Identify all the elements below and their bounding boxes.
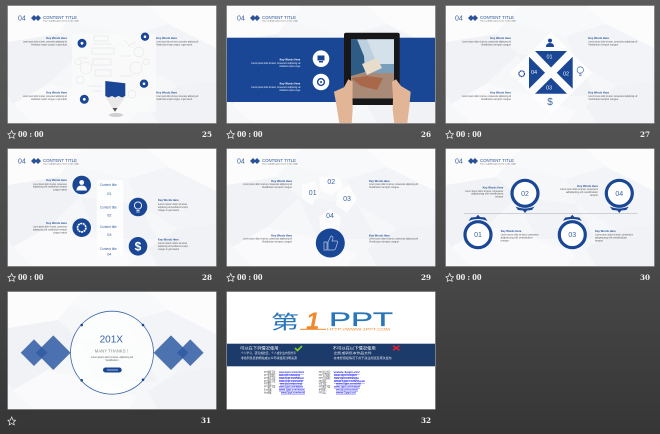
rings [465, 180, 632, 248]
text block: 04: Lorem ipsum dolor sit amet, consectetur [560, 188, 598, 191]
text block: bottom left: Vestibulum tempor congue [481, 98, 512, 101]
text block: bottom right: Vestibulum tempor congue, in gat mauris [156, 98, 193, 101]
petal numbers [309, 179, 351, 220]
text block: bottom left: Lorem ipsum dolor sit amet, consectetur adipiscing elit [243, 237, 292, 240]
slide header: Your subtitle goes here in the slide [43, 163, 79, 166]
text block: 04: adipiscing elit vestibulum [566, 191, 598, 194]
panel: slide 26 [226, 6, 436, 124]
link list left: www.1ppt.com/beijing/ [278, 373, 300, 377]
text block: left 1: congue mauris [53, 189, 68, 192]
link list left: www.1ppt.com/word/ [280, 390, 305, 394]
panel: slide 31 [8, 292, 216, 410]
slide header: CONTENT TITLE [262, 158, 296, 163]
prohibited usage [333, 346, 400, 360]
text block: top left: Lorem ipsum dolor sit amet, consectetur adipiscing elit [243, 183, 292, 186]
link list left: PPT素材下载： [264, 379, 277, 383]
closing text: Vestibulum [106, 359, 119, 362]
diagram numbers: 03 [546, 86, 552, 92]
link list left: PPT课件下载： [264, 385, 277, 389]
text block: bottom left: Lorem ipsum dolor sit amet, consectetur adipiscing elit [23, 95, 67, 98]
large circle [70, 311, 154, 394]
prohibited usage: ·出售或转售本作品文件 [333, 351, 372, 355]
text block: top right [588, 36, 638, 46]
text block: 04: Key Words Here [577, 184, 598, 188]
text block: 02: Key Words Here [483, 185, 504, 189]
text block: key words 1: Key Words Here [280, 58, 301, 62]
footer: slide 30: 30 [640, 273, 650, 282]
logo: PPT [329, 310, 394, 331]
text block: bottom right: Lorem ipsum dolor sit amet, consectetur adipiscing elit [369, 237, 418, 240]
text block: bottom right: Lorem ipsum dolor sit amet, consectetur adipiscing elit [156, 95, 199, 98]
logo: 1 [306, 308, 319, 335]
slide header: 04 [18, 158, 26, 166]
text block: bottom right: Lorem ipsum dolor sit amet, consectetur adipiscing elit [588, 95, 638, 98]
text block: 02 [465, 185, 504, 199]
link list right: www.1ppt.com/hangye/ [333, 376, 359, 380]
slide header: 04 [455, 158, 463, 166]
slide header [455, 15, 516, 23]
text block: top right: Key Words Here [588, 36, 610, 40]
text block: bottom left: Vestibulum tempor congue, in gat mauris [31, 98, 68, 101]
footer: slide 26 [227, 129, 431, 139]
text block: key words 1 [251, 58, 301, 68]
diagram numbers [531, 55, 569, 92]
footer: slide 25: 00 : 00 [18, 129, 44, 139]
footer: slide 29: 00 : 00 [237, 272, 263, 282]
link list right: www.1ppt.com/sucai/ [333, 379, 365, 383]
text block: right 1: congue in gat mauris [158, 209, 180, 212]
usage band [227, 344, 435, 366]
icon markers [78, 32, 149, 104]
text block: bottom left: Key Words Here [46, 90, 67, 94]
text block: right 1: Lorem ipsum dolor sit amet [158, 203, 187, 206]
link list right: www.1ppt.com/ziti/ [335, 382, 361, 386]
text block: left 2: Key Words Here [46, 221, 67, 225]
text block: bottom right: Vestibulum tempor congue [369, 241, 400, 244]
link list left: PPT教程： [264, 382, 273, 386]
icon: dollar circle [129, 237, 147, 256]
text block: key words 1: Lorem ipsum dolor sit amet, consectetur adipiscing elit [251, 62, 301, 65]
text block: bottom left: Lorem ipsum dolor sit amet, consectetur adipiscing elit [462, 95, 511, 98]
text block: bottom left: Vestibulum tempor congue [262, 241, 293, 244]
footer: slide 27 [446, 129, 650, 139]
text block: right 2 [158, 238, 188, 251]
icon: thumbs up circle [316, 228, 345, 258]
slide header [18, 15, 79, 23]
link list right: www.1ppt.com/jieri/ [333, 373, 357, 377]
logo: HTTP://WWW.1PPT.COM [327, 328, 390, 332]
text block: left 1: Lorem ipsum dolor sit amet, consectetur [33, 183, 67, 186]
petals [302, 177, 357, 231]
link list left [264, 370, 305, 394]
slide header: Your subtitle goes here in the slide [262, 163, 298, 166]
icon: people circle [72, 176, 91, 194]
petal numbers: 02 [327, 179, 335, 186]
text block: top right [156, 36, 199, 46]
text block: left 1: Key Words Here [46, 178, 67, 182]
text block: 02: tempor [495, 196, 504, 199]
link list left: Word模板： [264, 390, 273, 394]
text block: top left [23, 36, 68, 46]
text block: 01: tempor [501, 239, 509, 242]
link list left: PPT模板下载： [264, 370, 277, 374]
link list left: www.1ppt.com/moban/ [278, 370, 304, 374]
prohibited usage: 不可以在以下情况使用 [333, 346, 376, 351]
ring numbers: 03 [568, 232, 576, 239]
footer: slide 29: 29 [421, 273, 431, 282]
panel: slide 30 [446, 148, 654, 266]
footer: slide 31 [8, 416, 211, 425]
slide header: 04 [237, 16, 245, 22]
text block: right 1: Key Words Here [158, 198, 179, 202]
diagram numbers: 04 [531, 70, 537, 76]
text block: bottom right: Key Words Here [156, 90, 178, 94]
text block: top right: Lorem ipsum dolor sit amet, consectetur adipiscing elit [369, 183, 418, 186]
allowed usage: 可以在下列情况使用 [240, 346, 279, 351]
footer: slide 29 [227, 272, 431, 282]
text block: top right: Vestibulum tempor congue [369, 186, 400, 189]
link list right: www.1ppt.cn/ [335, 390, 356, 394]
text block: bottom right [369, 233, 418, 244]
link list right: PPT论坛交流： [319, 370, 332, 374]
tablet with photo and hands [334, 33, 411, 123]
logo [271, 308, 394, 335]
link list right [319, 370, 365, 394]
center cards: 01 [107, 191, 112, 196]
link list right: www.1ppt.com/shouchaobao/ [335, 387, 358, 391]
text block: right 2: congue in gat mauris [158, 248, 180, 251]
text block: top left: Key Words Here [271, 179, 292, 183]
slide header: CONTENT TITLE [43, 158, 77, 163]
text block: bottom right: Vestibulum tempor congue [588, 98, 619, 101]
text block: top right: Vestibulum tempor congue [588, 43, 619, 46]
panel: slide 25 [8, 6, 216, 124]
text block: left 2: Lorem ipsum dolor sit amet, consectetur [33, 226, 67, 229]
ring numbers: 02 [521, 191, 529, 198]
text block: bottom left [243, 233, 293, 244]
link list right: PPT素材： [319, 379, 328, 383]
text block: 04 [560, 184, 598, 197]
center cards: 04 [107, 251, 112, 256]
panel: slide 32 [226, 292, 436, 410]
text block: 01: Lorem ipsum dolor sit amet, consectetur [501, 234, 539, 237]
closing text: Lorem ipsum dolor sit amet, adipiscing elit [91, 356, 133, 359]
icon: person [546, 39, 554, 47]
text block: top left [462, 36, 512, 46]
text block: 01: adipiscing elit vestibulum [501, 236, 533, 239]
text block: top right: Lorem ipsum dolor sit amet, consectetur adipiscing elit [588, 41, 638, 44]
footer: slide 28 [8, 272, 212, 282]
slide header: CONTENT TITLE [262, 15, 296, 20]
text block: 02: Lorem ipsum dolor sit amet, consectetur [465, 190, 504, 193]
diamonds right [154, 335, 204, 370]
text block: 03: tempor [595, 239, 603, 242]
text block: top left: Key Words Here [46, 36, 67, 40]
text block: key words 2: Vestibulum tempor congue [279, 89, 301, 92]
text block: top left: Lorem ipsum dolor sit amet, consectetur adipiscing elit [23, 41, 67, 44]
slide header: CONTENT TITLE [480, 15, 514, 20]
year: 201X [100, 334, 123, 346]
center cards: 02 [107, 212, 112, 217]
link list right: PPT行业模板： [319, 376, 332, 380]
text block: top left: Key Words Here [490, 36, 511, 40]
icon: gear circle [72, 218, 91, 237]
link list right: 字体下载： [319, 382, 328, 386]
text block: top left: Vestibulum tempor congue, in gat mauris [31, 43, 68, 46]
link list left: PPT图表下载： [264, 376, 277, 380]
text block: bottom right [156, 90, 199, 101]
text block: 01 [501, 229, 539, 242]
slide header [18, 158, 79, 166]
slide header [237, 158, 298, 166]
text block: top right: Key Words Here [369, 179, 390, 183]
link list right: www.1ppt.com/xiazai/ [333, 385, 360, 389]
link list left: www.1ppt.com/kejian/ [278, 385, 303, 389]
ring numbers: 04 [615, 191, 623, 198]
slide header [455, 158, 516, 166]
text block: bottom left: Key Words Here [490, 90, 511, 94]
panel: slide 28 [8, 148, 216, 266]
petal numbers: 01 [309, 190, 317, 197]
text block: bottom left: Key Words Here [271, 233, 292, 237]
text block: key words 2: Lorem ipsum dolor sit amet, consectetur adipiscing elit [251, 86, 301, 89]
petal numbers: 03 [343, 196, 351, 203]
text block: 03: Key Words Here [595, 229, 616, 233]
slide header: 04 [455, 16, 463, 22]
icon: dollar circle: $ [135, 240, 142, 254]
panel: slide 27 [446, 6, 654, 124]
center cards: Content title [100, 247, 117, 251]
icon: dollar: $ [547, 97, 553, 108]
text block: top left [243, 179, 293, 189]
link list right: PPT教程下载： [319, 385, 332, 389]
text block: 04: tempor [590, 194, 598, 197]
footer: slide 30 [446, 272, 650, 282]
slide header: Your subtitle goes here in the slide [43, 20, 79, 23]
text block: key words 1: Vestibulum tempor congue [279, 65, 301, 68]
X diagram [529, 51, 573, 94]
link list right: www.1ppt.cn/ [332, 370, 360, 374]
text block: right 2: adipiscing elit vestibulum tempor [158, 245, 188, 248]
sketch doodles [72, 34, 156, 112]
text block: 03: Lorem ipsum dolor sit amet, consectetur [595, 234, 633, 237]
footer: slide 26: 26 [421, 130, 431, 139]
text block: left 2 [33, 221, 68, 235]
text block: bottom left [462, 90, 512, 101]
text block: 01: Key Words Here [501, 229, 522, 233]
icons: white circles [313, 50, 329, 90]
link list left: Excel模板： [264, 387, 273, 391]
icon: gear [519, 71, 524, 76]
text block: top left: Vestibulum tempor congue [481, 43, 512, 46]
center cards: Content title [100, 183, 117, 187]
timeline axis [464, 212, 637, 215]
text block: top left: Lorem ipsum dolor sit amet, consectetur adipiscing elit [462, 41, 511, 44]
prohibited usage: ·在未经授权情况下用于商业用途及再次发布 [333, 356, 392, 360]
center cards: Content title [100, 225, 117, 229]
panel: slide 29 [226, 148, 436, 266]
footer: slide 25 [8, 129, 212, 139]
slide header: CONTENT TITLE [480, 158, 514, 163]
button [103, 368, 122, 372]
text block: left 1 [33, 178, 68, 192]
text block: right 1 [158, 198, 188, 212]
text block: 03 [595, 229, 633, 242]
text block: top right: Key Words Here [156, 36, 178, 40]
text block: key words 2: Key Words Here [280, 82, 301, 86]
text block: top right [369, 179, 418, 189]
footer: slide 27: 00 : 00 [456, 129, 482, 139]
link list right: PPT论坛： [319, 390, 328, 394]
slide header: Your subtitle goes here in the slide [480, 20, 516, 23]
center cards [97, 180, 123, 257]
icon: bulb circle [129, 198, 147, 216]
text block: right 2: Lorem ipsum dolor sit amet [158, 242, 187, 245]
link list left: www.1ppt.com/jiaocheng/ [279, 382, 302, 386]
closing text [91, 356, 133, 362]
allowed usage [240, 346, 302, 360]
link list left: www.1ppt.com/excel/ [278, 387, 305, 391]
ring numbers: 01 [474, 232, 482, 239]
footer: slide 27: 27 [640, 130, 650, 139]
diagram numbers: 01 [546, 55, 553, 61]
text block: left 1: adipiscing elit vestibulum tempor [33, 186, 67, 189]
text block: right 1: adipiscing elit vestibulum tempor [158, 206, 188, 209]
footer: slide 32: 32 [421, 416, 431, 425]
chevrons [468, 206, 629, 221]
text block: top left: Vestibulum tempor congue [262, 186, 293, 189]
footer: slide 31: 31 [201, 416, 211, 425]
link list left: www.1ppt.com/sucai/ [278, 379, 303, 383]
diagram numbers: 02 [563, 72, 569, 78]
allowed usage: ·非盈利性质的网站或公众号转载需注明来源 [240, 356, 297, 360]
logo: 第 [271, 312, 299, 333]
text block: top right: Vestibulum tempor congue, in gat mauris [156, 43, 193, 46]
blue band [227, 38, 435, 102]
slide header: 04 [237, 158, 245, 166]
slide header [237, 15, 298, 23]
link list left: PPT背景图片： [264, 373, 277, 377]
text block: 02: adipiscing elit vestibulum [471, 193, 503, 196]
link list right: 手抄报： [319, 387, 328, 391]
slide header: Your subtitle goes here in the slide [480, 163, 516, 166]
center cards: Content title [100, 206, 117, 210]
slide header: 04 [18, 16, 26, 22]
center cards: 03 [107, 232, 112, 237]
ring numbers [474, 191, 623, 239]
white diamond backdrop [510, 32, 592, 114]
link list left: www.1ppt.com/tubiao/ [278, 376, 304, 380]
footer: slide 28: 00 : 00 [18, 272, 44, 282]
text block: right 2: Key Words Here [158, 238, 179, 242]
thanks: MANY THANKS ! [95, 348, 128, 353]
diamonds left [21, 335, 71, 370]
text block: bottom right: Key Words Here [369, 233, 390, 237]
text block: bottom left [23, 90, 68, 101]
text block: bottom right: Key Words Here [588, 90, 610, 94]
footer: slide 26: 00 : 00 [237, 129, 263, 139]
text block: left 2: congue mauris [53, 232, 68, 235]
text block: left 2: adipiscing elit vestibulum tempor [33, 229, 67, 232]
petal numbers: 04 [326, 213, 334, 220]
text block: 03: adipiscing elit vestibulum [595, 236, 627, 239]
text block: bottom right [588, 90, 638, 101]
footer: slide 25: 25 [202, 130, 212, 139]
icon: pencil [105, 81, 125, 117]
footer: slide 28: 28 [202, 273, 212, 282]
text block: key words 2 [251, 82, 301, 92]
allowed usage: ·个人学习、研究或欣赏，个人或企业内部分享 [240, 351, 296, 355]
slide header: CONTENT TITLE [43, 15, 77, 20]
slide header: Your subtitle goes here in the slide [262, 20, 298, 23]
text block: top right: Lorem ipsum dolor sit amet, consectetur adipiscing elit [156, 41, 199, 44]
icon: light bulb [577, 67, 584, 76]
link list right: PPT节日模板： [319, 373, 332, 377]
footer: slide 30: 00 : 00 [456, 272, 482, 282]
